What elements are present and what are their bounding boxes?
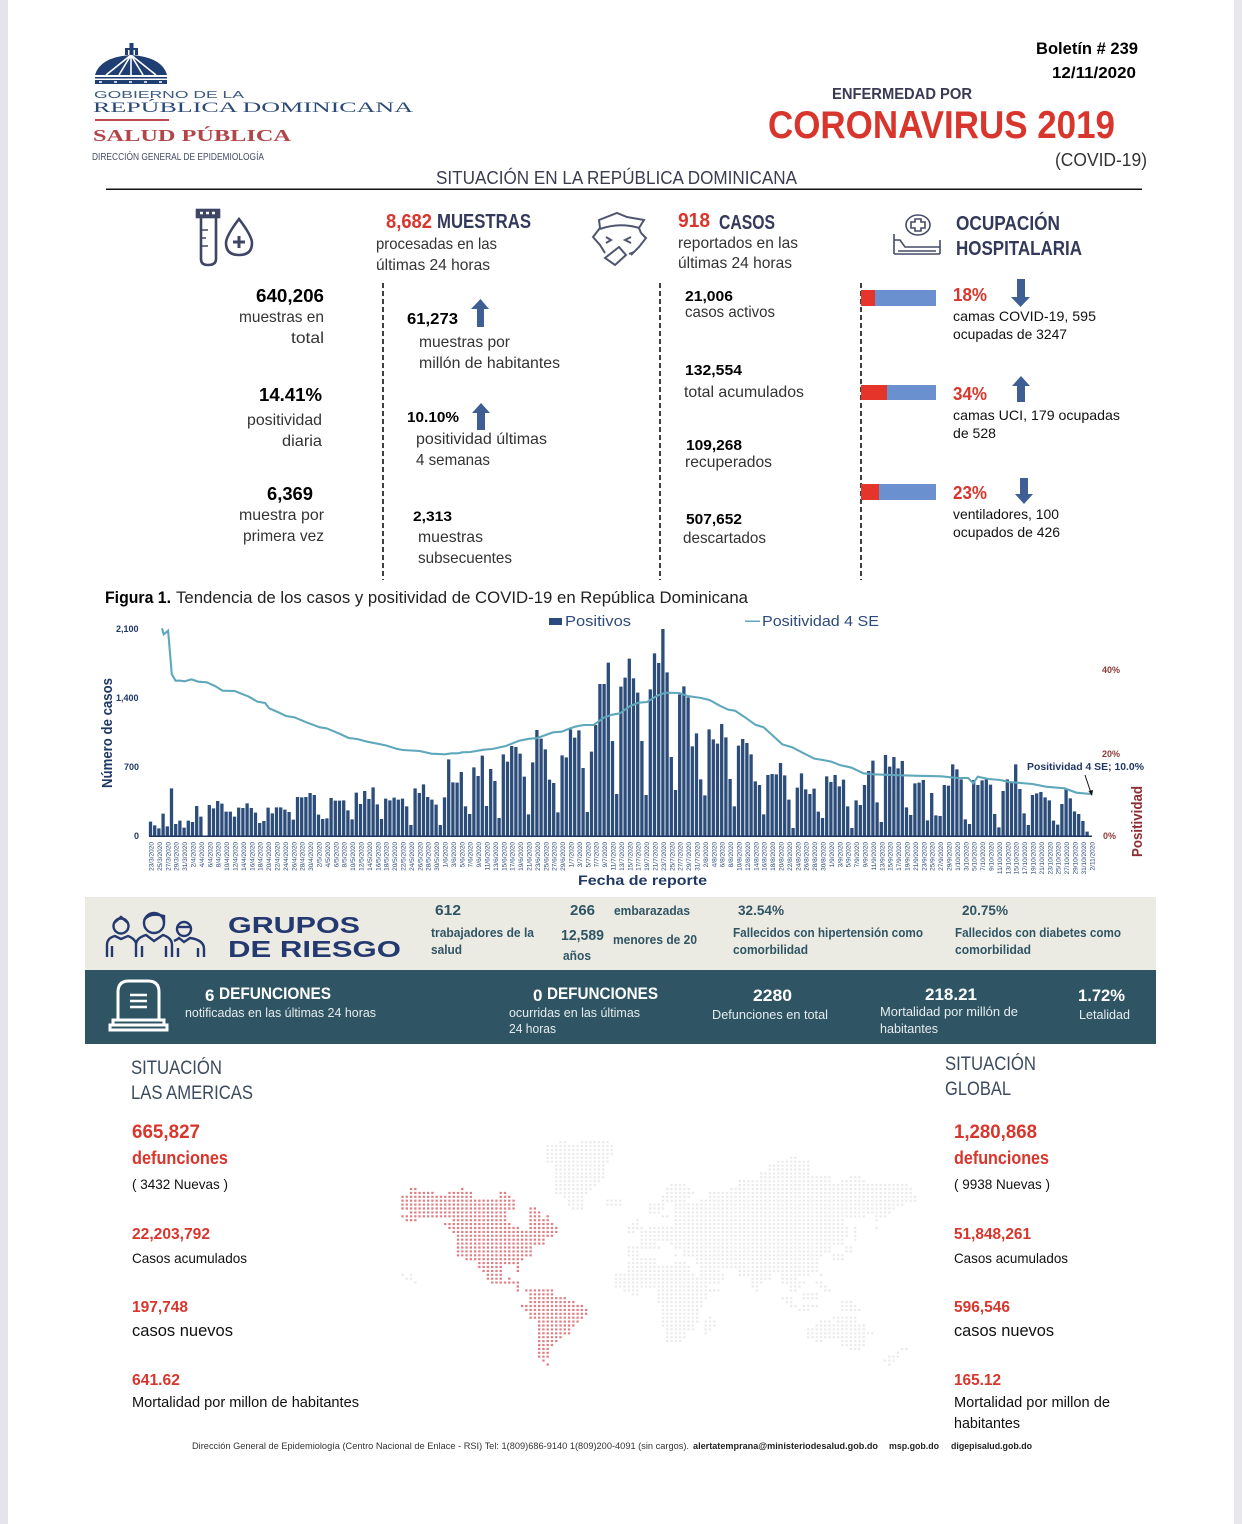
panel: casos column: 21,006 bbox=[685, 288, 733, 305]
x axis date labels: 29/6/2020 bbox=[560, 842, 567, 871]
panel: muestras column 2: muestras bbox=[418, 529, 483, 546]
panel: muestras heading bbox=[376, 211, 531, 274]
panel: defunciones bbox=[85, 970, 1156, 1044]
stat: trabajadores: trabajadores de la bbox=[431, 926, 535, 940]
x axis date labels: 5/10/2020 bbox=[972, 842, 979, 871]
footer: alertatemprana@ministeriodesalud.gob.do bbox=[693, 1441, 878, 1452]
x axis date labels: 24/4/2020 bbox=[283, 842, 290, 871]
x axis date labels: 20/5/2020 bbox=[392, 842, 399, 871]
bulletin number: Boletín # 239 bbox=[1036, 40, 1138, 58]
x axis date labels: 21/6/2020 bbox=[526, 842, 534, 871]
panel: situación global: 596,546 bbox=[954, 1299, 1010, 1316]
x axis date labels: 18/5/2020 bbox=[384, 842, 391, 871]
x axis date labels: 17/9/2020 bbox=[896, 842, 903, 871]
panel: situación las américas: casos nuevos bbox=[132, 1321, 233, 1340]
x axis date labels: 31/10/2020 bbox=[1081, 842, 1088, 875]
logo rule bbox=[95, 119, 169, 121]
panel: situación global: 1,280,868 bbox=[954, 1122, 1037, 1143]
panel: ocupación hospitalaria: ventiladores, 100 bbox=[953, 506, 1059, 522]
x axis date labels: 10/4/2020 bbox=[224, 842, 231, 871]
x axis date labels: 26/8/2020 bbox=[804, 842, 811, 871]
x axis date labels: 25/7/2020 bbox=[669, 842, 676, 871]
x axis date labels: 17/6/2020 bbox=[510, 842, 517, 871]
value 18%: 18% bbox=[953, 285, 987, 305]
x axis date labels: 7/6/2020 bbox=[468, 842, 475, 867]
left axis labels: 1,400 bbox=[116, 693, 139, 703]
x axis date labels: 9/9/2020 bbox=[862, 842, 870, 867]
stat: embarazadas: 266 bbox=[570, 902, 595, 919]
x axis date labels: 13/10/2020 bbox=[1005, 842, 1012, 875]
panel: casos column: 132,554 bbox=[685, 362, 743, 379]
x axis date labels: 3/7/2020 bbox=[577, 842, 584, 867]
bar: camas covid bbox=[861, 290, 936, 306]
logo text: dirección: DIRECCIÓN GENERAL DE EPIDEMIOLOGÍA bbox=[92, 150, 264, 163]
bars: positivos bbox=[150, 629, 1087, 837]
x axis date labels: 4/8/2020 bbox=[711, 842, 718, 867]
x axis date labels: 13/6/2020 bbox=[493, 842, 500, 871]
x axis date labels: 28/5/2020 bbox=[426, 842, 433, 871]
stat: hipertensión: comorbilidad bbox=[733, 943, 808, 957]
panel: muestras column 2: muestras por bbox=[419, 334, 511, 351]
stat: mortalidad: habitantes bbox=[880, 1021, 938, 1036]
legend: Positividad 4 SE bbox=[762, 613, 879, 630]
x axis date labels: 5/6/2020 bbox=[459, 842, 466, 867]
x axis date labels: 7/10/2020 bbox=[980, 842, 987, 871]
panel: muestras column 1: muestra por bbox=[239, 507, 325, 524]
x axis date labels: 19/10/2020 bbox=[1030, 842, 1038, 875]
logo text: salud pública: SALUD PÚBLICA bbox=[93, 126, 292, 145]
x axis date labels: 14/5/2020 bbox=[367, 842, 374, 871]
panel: muestras column 1: total bbox=[291, 330, 324, 347]
panel: situación las américas: LAS AMERICAS bbox=[131, 1083, 253, 1104]
panel: situación las américas: 22,203,792 bbox=[132, 1226, 210, 1243]
arrow up bbox=[1012, 376, 1030, 402]
panel: situación global: casos nuevos bbox=[954, 1321, 1054, 1340]
x axis date labels: 27/9/2020 bbox=[938, 842, 945, 871]
stat: 0 defunciones: ocurridas en las últimas bbox=[509, 1005, 640, 1020]
panel: ocupación heading bbox=[956, 211, 1082, 260]
right axis title: Positividad bbox=[1129, 786, 1146, 857]
panel: muestras column 2: positividad últimas bbox=[416, 431, 547, 448]
left axis labels: 0 bbox=[134, 831, 139, 841]
stat: letalidad bbox=[1078, 986, 1130, 1022]
footer bbox=[192, 1441, 1032, 1452]
stat: trabajadores: 612 bbox=[435, 902, 461, 919]
stat: hipertensión bbox=[733, 902, 923, 957]
x axis date labels: 1/7/2020 bbox=[568, 842, 576, 867]
panel: casos heading: últimas 24 horas bbox=[678, 255, 792, 272]
x axis date labels: 5/7/2020 bbox=[585, 842, 592, 867]
footer: Dirección General de Epidemiología (Centro Nacional de Enlace - RSI) Tel: 1(809)686-9140 1(809)200-4091 (sin cargos). bbox=[192, 1441, 689, 1452]
stat: mortalidad: 218.21 bbox=[925, 985, 977, 1004]
panel: muestras column 1: muestras en bbox=[239, 309, 324, 326]
x axis date labels: 31/7/2020 bbox=[694, 842, 702, 871]
rest of world dots bbox=[401, 1142, 918, 1364]
header: title block bbox=[768, 40, 1147, 170]
panel: muestras column 2 bbox=[407, 299, 560, 567]
panel: muestras column 2: 2,313 bbox=[413, 508, 452, 524]
figure title: Figura 1. bbox=[105, 588, 171, 607]
panel: muestras heading: procesadas en las bbox=[376, 236, 497, 253]
arrow up bbox=[471, 299, 489, 327]
panel: muestras column 1: primera vez bbox=[243, 528, 324, 545]
section heading: SITUACIÓN EN LA REPÚBLICA DOMINICANA bbox=[436, 167, 797, 188]
x axis date labels: 5/9/2020 bbox=[846, 842, 853, 867]
x axis date labels: 16/4/2020 bbox=[249, 842, 256, 871]
panel: situación las américas bbox=[131, 1057, 359, 1411]
x axis date labels: 21/9/2020 bbox=[913, 842, 920, 871]
panel: situación las américas: 197,748 bbox=[132, 1299, 188, 1316]
x axis date labels: 17/7/2020 bbox=[636, 842, 643, 871]
arrow down bbox=[1015, 478, 1033, 504]
subtitle: (COVID-19) bbox=[1055, 150, 1147, 170]
right axis labels: 40% bbox=[1102, 665, 1120, 675]
x axis date labels: 7/7/2020 bbox=[594, 842, 601, 867]
x axis date labels: 18/4/2020 bbox=[258, 842, 265, 871]
panel: casos column bbox=[683, 288, 804, 547]
panel: ocupación heading: OCUPACIÓN bbox=[956, 211, 1060, 235]
x axis date labels: 19/9/2020 bbox=[904, 842, 912, 871]
panel: muestras column 2: 10.10% bbox=[407, 409, 459, 426]
x axis date labels: 11/9/2020 bbox=[871, 842, 878, 870]
x axis date labels: 28/4/2020 bbox=[300, 842, 307, 871]
panel: muestras heading: MUESTRAS bbox=[437, 211, 531, 233]
icon: tombstone bbox=[110, 981, 167, 1030]
panel: muestras column 1: 14.41% bbox=[259, 385, 322, 405]
x axis date labels: 15/9/2020 bbox=[888, 842, 895, 871]
panel: situación las américas: ( 3432 Nuevas ) bbox=[132, 1176, 228, 1192]
x axis date labels: 22/4/2020 bbox=[274, 842, 282, 871]
panel: casos heading bbox=[678, 210, 798, 272]
legend bbox=[549, 613, 879, 630]
panel: situación global: Mortalidad por millon de bbox=[954, 1394, 1110, 1411]
stat: total: 2280 bbox=[753, 986, 792, 1005]
stat: trabajadores bbox=[431, 902, 535, 957]
panel: muestras column 2: millón de habitantes bbox=[419, 355, 560, 372]
x axis date labels: 27/6/2020 bbox=[552, 842, 559, 871]
x axis date labels: 28/8/2020 bbox=[812, 842, 819, 871]
left axis labels: 700 bbox=[124, 762, 139, 772]
panel: muestras column 2: 4 semanas bbox=[416, 452, 490, 469]
panel: muestras heading: 8,682 bbox=[386, 211, 432, 233]
icon: dome bbox=[95, 43, 167, 84]
panel: muestras column 1: 640,206 bbox=[256, 286, 324, 306]
line: positividad 4 SE bbox=[162, 628, 1091, 794]
date: 12/11/2020 bbox=[1052, 65, 1136, 82]
x axis date labels: 27/7/2020 bbox=[678, 842, 685, 871]
map: dotted world bbox=[401, 1142, 918, 1364]
americas dots bbox=[401, 1189, 589, 1364]
panel: muestras column 2: 61,273 bbox=[407, 311, 458, 328]
right axis labels bbox=[1102, 665, 1120, 841]
x axis date labels: 29/10/2020 bbox=[1072, 842, 1080, 875]
x axis date labels: 22/5/2020 bbox=[400, 842, 408, 871]
x axis date labels: 9/10/2020 bbox=[988, 842, 996, 871]
panel: situación global bbox=[945, 1053, 1110, 1432]
x axis date labels: 18/8/2020 bbox=[770, 842, 777, 871]
x axis date labels: 14/8/2020 bbox=[753, 842, 760, 871]
x axis date labels: 11/7/2020 bbox=[610, 842, 618, 870]
x axis date labels: 19/6/2020 bbox=[518, 842, 525, 871]
panel: muestras column 1: 6,369 bbox=[267, 484, 313, 504]
x axis date labels: 13/9/2020 bbox=[879, 842, 886, 871]
x axis date labels: 22/8/2020 bbox=[787, 842, 794, 871]
stat: menores: años bbox=[563, 949, 591, 963]
panel: ocupación hospitalaria: camas UCI, 179 ocupadas bbox=[953, 407, 1120, 423]
panel: casos column: total acumulados bbox=[684, 384, 804, 401]
stat: menores: 12,589 bbox=[561, 927, 604, 944]
stat: letalidad: Letalidad bbox=[1079, 1007, 1130, 1022]
panel: situación global: SITUACIÓN bbox=[945, 1053, 1036, 1075]
stat: total: Defunciones en total bbox=[712, 1007, 828, 1022]
x axis date labels: 21/7/2020 bbox=[652, 842, 660, 871]
icon: hospital bed bbox=[894, 215, 940, 254]
x axis date labels: 16/8/2020 bbox=[762, 842, 769, 871]
x axis date labels: 26/4/2020 bbox=[291, 842, 298, 871]
panel: situación global: ( 9938 Nuevas ) bbox=[954, 1176, 1050, 1192]
chart: casos y positividad bbox=[99, 613, 1146, 888]
value 23%: 23% bbox=[953, 483, 987, 503]
x axis date labels: 26/5/2020 bbox=[417, 842, 424, 871]
stat: 6 defunciones: 6 bbox=[205, 986, 214, 1005]
x axis date labels bbox=[148, 842, 1096, 875]
stat: trabajadores: salud bbox=[431, 943, 462, 957]
x axis date labels: 27/10/2020 bbox=[1064, 842, 1071, 875]
x axis date labels: 1/10/2020 bbox=[955, 842, 962, 871]
x axis date labels: 7/9/2020 bbox=[854, 842, 861, 867]
panel: situación las américas: SITUACIÓN bbox=[131, 1057, 222, 1079]
x axis date labels: 8/5/2020 bbox=[342, 842, 349, 867]
x axis date labels: 2/4/2020 bbox=[190, 842, 198, 867]
x axis date labels: 29/3/2020 bbox=[174, 842, 181, 871]
x axis date labels: 4/4/2020 bbox=[199, 842, 206, 867]
x axis date labels: 15/7/2020 bbox=[627, 842, 634, 871]
panel: ocupación hospitalaria: camas COVID-19, 595 bbox=[953, 308, 1096, 324]
stat: mortalidad: Mortalidad por millón de bbox=[880, 1004, 1018, 1019]
main title: CORONAVIRUS 2019 bbox=[768, 104, 1115, 147]
bar: camas uci bbox=[861, 385, 936, 400]
x axis date labels: 20/4/2020 bbox=[266, 842, 273, 871]
panel: muestras column 1 bbox=[239, 286, 325, 545]
panel: casos column: 109,268 bbox=[686, 437, 742, 454]
panel: casos heading: CASOS bbox=[719, 212, 775, 234]
panel: ocupación hospitalaria bbox=[861, 279, 1120, 540]
heading: de riesgo: DE RIESGO bbox=[228, 936, 401, 962]
arrow down bbox=[1011, 279, 1030, 307]
x axis date labels: 23/7/2020 bbox=[661, 842, 668, 871]
x axis date labels: 6/5/2020 bbox=[333, 842, 340, 867]
stat: menores bbox=[561, 927, 697, 963]
stat: embarazadas: embarazadas bbox=[614, 904, 690, 918]
heading: grupos: GRUPOS bbox=[228, 912, 360, 938]
footer: digepisalud.gob.do bbox=[951, 1441, 1032, 1452]
header: logo bbox=[92, 43, 414, 163]
x axis date labels: 14/4/2020 bbox=[241, 842, 248, 871]
x axis date labels: 2/5/2020 bbox=[316, 842, 324, 867]
right axis labels: 20% bbox=[1102, 749, 1120, 759]
x axis date labels: 6/4/2020 bbox=[207, 842, 214, 867]
icon: sneezing face bbox=[593, 213, 646, 265]
x axis date labels: 11/6/2020 bbox=[484, 842, 492, 870]
stat: 6 defunciones: notificadas en las últimas 24 horas bbox=[185, 1005, 376, 1020]
x axis date labels: 8/4/2020 bbox=[216, 842, 223, 867]
panel: casos heading: 918 bbox=[678, 210, 710, 232]
x axis date labels: 15/6/2020 bbox=[501, 842, 508, 871]
footer: msp.gob.do bbox=[889, 1441, 939, 1452]
panel: situación las américas: 641.62 bbox=[132, 1372, 180, 1389]
panel: situación global: Casos acumulados bbox=[954, 1250, 1068, 1266]
x axis date labels: 25/3/2020 bbox=[157, 842, 164, 871]
panel: situación global: 51,848,261 bbox=[954, 1226, 1031, 1243]
stat: hipertensión: Fallecidos con hipertensión como bbox=[733, 926, 923, 940]
x axis date labels: 12/8/2020 bbox=[745, 842, 752, 871]
x axis date labels: 12/5/2020 bbox=[358, 842, 366, 871]
stat: 6 defunciones: DEFUNCIONES bbox=[219, 984, 331, 1003]
panel: situación global: 165.12 bbox=[954, 1372, 1001, 1389]
x axis date labels: 23/3/2020 bbox=[148, 842, 156, 871]
value 34%: 34% bbox=[953, 384, 987, 404]
panel: muestras heading: últimas 24 horas bbox=[376, 257, 490, 274]
panel: ocupación heading: HOSPITALARIA bbox=[956, 238, 1082, 260]
x axis date labels: 11/10/2020 bbox=[997, 842, 1004, 874]
panel: situación las américas: Mortalidad por millon de habitantes bbox=[132, 1394, 359, 1411]
stat: diabetes: Fallecidos con diabetes como bbox=[955, 926, 1121, 940]
panel: casos heading: reportados en las bbox=[678, 235, 798, 252]
stat: 0 defunciones: 24 horas bbox=[509, 1021, 556, 1036]
x axis date labels: 3/6/2020 bbox=[451, 842, 458, 867]
icon: people bbox=[107, 913, 204, 957]
panel: situación global: habitantes bbox=[954, 1415, 1020, 1432]
callout: positividad 10% bbox=[1027, 762, 1144, 796]
stat: 0 defunciones: DEFUNCIONES bbox=[547, 984, 658, 1003]
panel: ocupación hospitalaria: ocupadas de 3247 bbox=[953, 326, 1067, 342]
x axis date labels: 20/8/2020 bbox=[778, 842, 786, 871]
callout: positividad 10%: Positividad 4 SE; 10.0% bbox=[1027, 762, 1144, 773]
stat: diabetes: 20.75% bbox=[962, 902, 1009, 918]
logo text: gobierno: GOBIERNO DE LA bbox=[94, 90, 245, 101]
stat: 6 defunciones bbox=[185, 984, 376, 1020]
x axis date labels: 17/10/2020 bbox=[1022, 842, 1029, 875]
panel: casos column: casos activos bbox=[685, 304, 775, 321]
x axis date labels: 15/10/2020 bbox=[1014, 842, 1021, 875]
x axis date labels: 10/5/2020 bbox=[350, 842, 357, 871]
x axis date labels: 24/8/2020 bbox=[795, 842, 802, 871]
stat: embarazadas bbox=[570, 902, 690, 919]
x axis date labels: 10/8/2020 bbox=[736, 842, 744, 871]
panel: muestras column 1: positividad bbox=[247, 412, 322, 429]
panel: casos column: recuperados bbox=[685, 454, 772, 471]
x axis date labels: 13/7/2020 bbox=[619, 842, 626, 871]
panel: situación global: GLOBAL bbox=[945, 1079, 1011, 1100]
x axis date labels: 9/7/2020 bbox=[602, 842, 609, 867]
x axis date labels: 6/8/2020 bbox=[720, 842, 727, 867]
x axis date labels: 23/10/2020 bbox=[1047, 842, 1054, 875]
bar: ventiladores bbox=[861, 484, 936, 500]
kicker: ENFERMEDAD POR bbox=[832, 86, 972, 103]
x axis date labels: 27/3/2020 bbox=[165, 842, 172, 871]
panel: ocupación hospitalaria: ocupados de 426 bbox=[953, 524, 1060, 540]
right axis labels: 0% bbox=[1103, 831, 1116, 841]
stat: diabetes bbox=[955, 902, 1121, 957]
stat: menores: menores de 20 bbox=[613, 933, 697, 947]
stat: total bbox=[712, 986, 828, 1022]
x axis date labels: 2/11/2020 bbox=[1089, 842, 1096, 870]
logo text: república dominicana: REPÚBLICA DOMINICANA bbox=[93, 99, 414, 116]
panel: situación las américas: 665,827 bbox=[132, 1122, 200, 1143]
panel: ocupación hospitalaria: de 528 bbox=[953, 425, 996, 441]
x axis date labels: 3/10/2020 bbox=[963, 842, 970, 871]
figure title: Tendencia de los casos y positividad de COVID-19 en República Dominicana bbox=[176, 588, 749, 607]
x axis title: Fecha de reporte bbox=[578, 872, 707, 888]
x axis date labels: 1/9/2020 bbox=[829, 842, 836, 867]
stat: 0 defunciones: 0 bbox=[533, 986, 542, 1005]
x axis date labels: 1/6/2020 bbox=[442, 842, 450, 867]
panel: situación las américas: Casos acumulados bbox=[132, 1250, 247, 1266]
x axis date labels: 16/5/2020 bbox=[375, 842, 382, 871]
left axis labels: 2,100 bbox=[116, 624, 139, 634]
panel: situación las américas: defunciones bbox=[132, 1148, 228, 1168]
x axis date labels: 12/4/2020 bbox=[232, 842, 240, 871]
panel: casos column: 507,652 bbox=[686, 511, 742, 528]
arrow up bbox=[472, 403, 490, 430]
panel: muestras column 2: subsecuentes bbox=[418, 550, 512, 567]
stat: letalidad: 1.72% bbox=[1078, 986, 1125, 1005]
icon: test tube and drop bbox=[197, 210, 252, 265]
panel: casos column: descartados bbox=[683, 530, 766, 547]
legend: Positivos bbox=[565, 613, 631, 630]
x axis date labels: 21/10/2020 bbox=[1039, 842, 1046, 875]
stat: 0 defunciones bbox=[509, 984, 658, 1036]
left axis title: Número de casos bbox=[99, 678, 116, 788]
x axis date labels: 23/6/2020 bbox=[535, 842, 542, 871]
x axis date labels: 3/9/2020 bbox=[837, 842, 844, 867]
x axis date labels: 23/9/2020 bbox=[921, 842, 928, 871]
x axis date labels: 29/9/2020 bbox=[946, 842, 954, 871]
x axis date labels: 29/7/2020 bbox=[686, 842, 693, 871]
x axis date labels: 30/8/2020 bbox=[820, 842, 828, 871]
panel: situación global: defunciones bbox=[954, 1148, 1049, 1168]
x axis date labels: 25/10/2020 bbox=[1056, 842, 1063, 875]
x axis date labels: 4/5/2020 bbox=[325, 842, 332, 867]
x axis date labels: 31/3/2020 bbox=[182, 842, 189, 871]
x axis date labels: 30/4/2020 bbox=[308, 842, 315, 871]
x axis date labels: 24/5/2020 bbox=[409, 842, 416, 871]
x axis date labels: 25/9/2020 bbox=[930, 842, 937, 871]
x axis date labels: 2/8/2020 bbox=[703, 842, 710, 867]
stat: hipertensión: 32.54% bbox=[738, 902, 785, 918]
x axis date labels: 8/8/2020 bbox=[728, 842, 735, 867]
x axis date labels: 25/6/2020 bbox=[543, 842, 550, 871]
x axis date labels: 30/5/2020 bbox=[434, 842, 441, 871]
stat: diabetes: comorbilidad bbox=[955, 943, 1031, 957]
left axis labels bbox=[116, 624, 139, 841]
x axis date labels: 19/7/2020 bbox=[644, 842, 651, 871]
panel: grupos de riesgo bbox=[85, 897, 1156, 970]
stat: mortalidad bbox=[880, 985, 1018, 1036]
x axis date labels: 9/6/2020 bbox=[476, 842, 483, 867]
panel: muestras column 1: diaria bbox=[282, 433, 322, 450]
